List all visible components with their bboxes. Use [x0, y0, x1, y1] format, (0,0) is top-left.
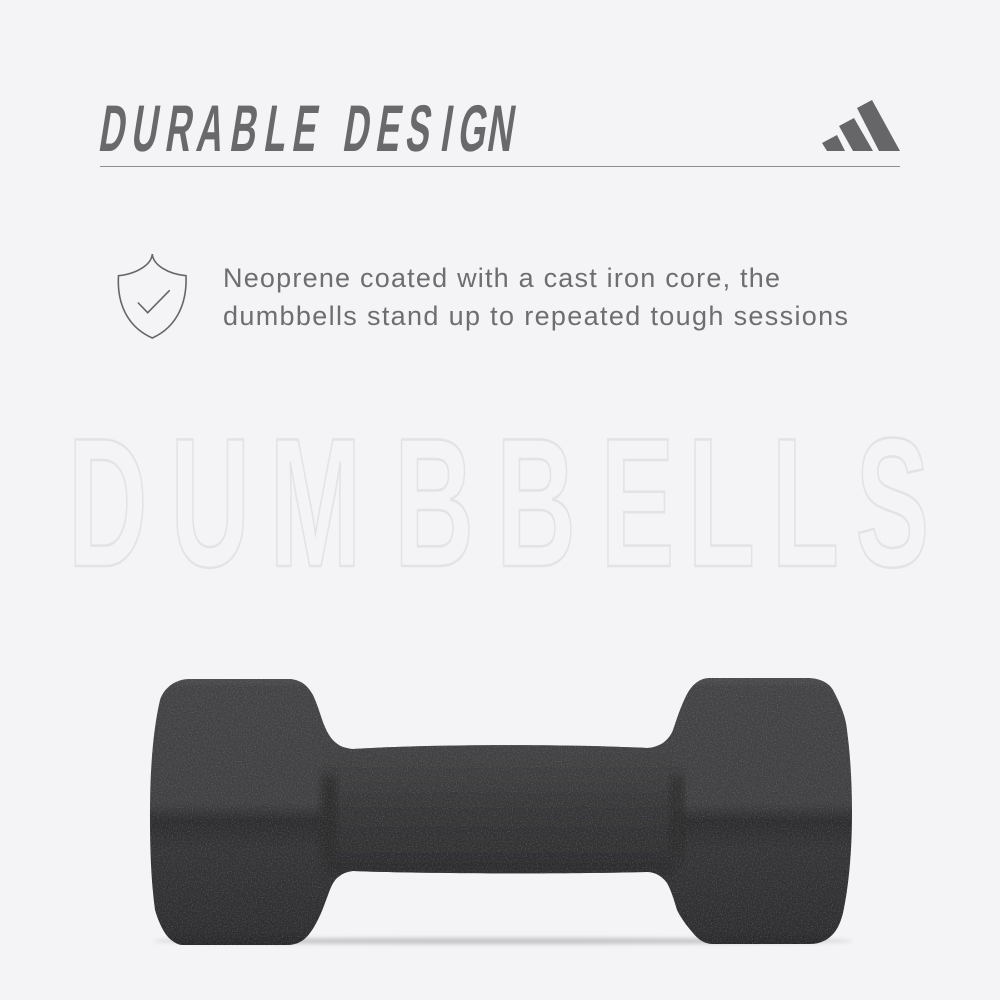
title: DURABLE DESIGN — [95, 93, 520, 166]
dumbbell photo — [140, 670, 860, 960]
description text: Neoprene coated with a cast iron core, the — [223, 263, 780, 293]
description text — [223, 263, 848, 331]
icon: brand logo — [822, 100, 900, 151]
icon: shield with check — [118, 254, 186, 338]
dumbbell body — [150, 678, 852, 945]
floor shadow — [153, 938, 853, 944]
description text: dumbbells stand up to repeated tough sessions — [223, 301, 848, 331]
watermark word: DUMBBELLS — [68, 401, 929, 606]
